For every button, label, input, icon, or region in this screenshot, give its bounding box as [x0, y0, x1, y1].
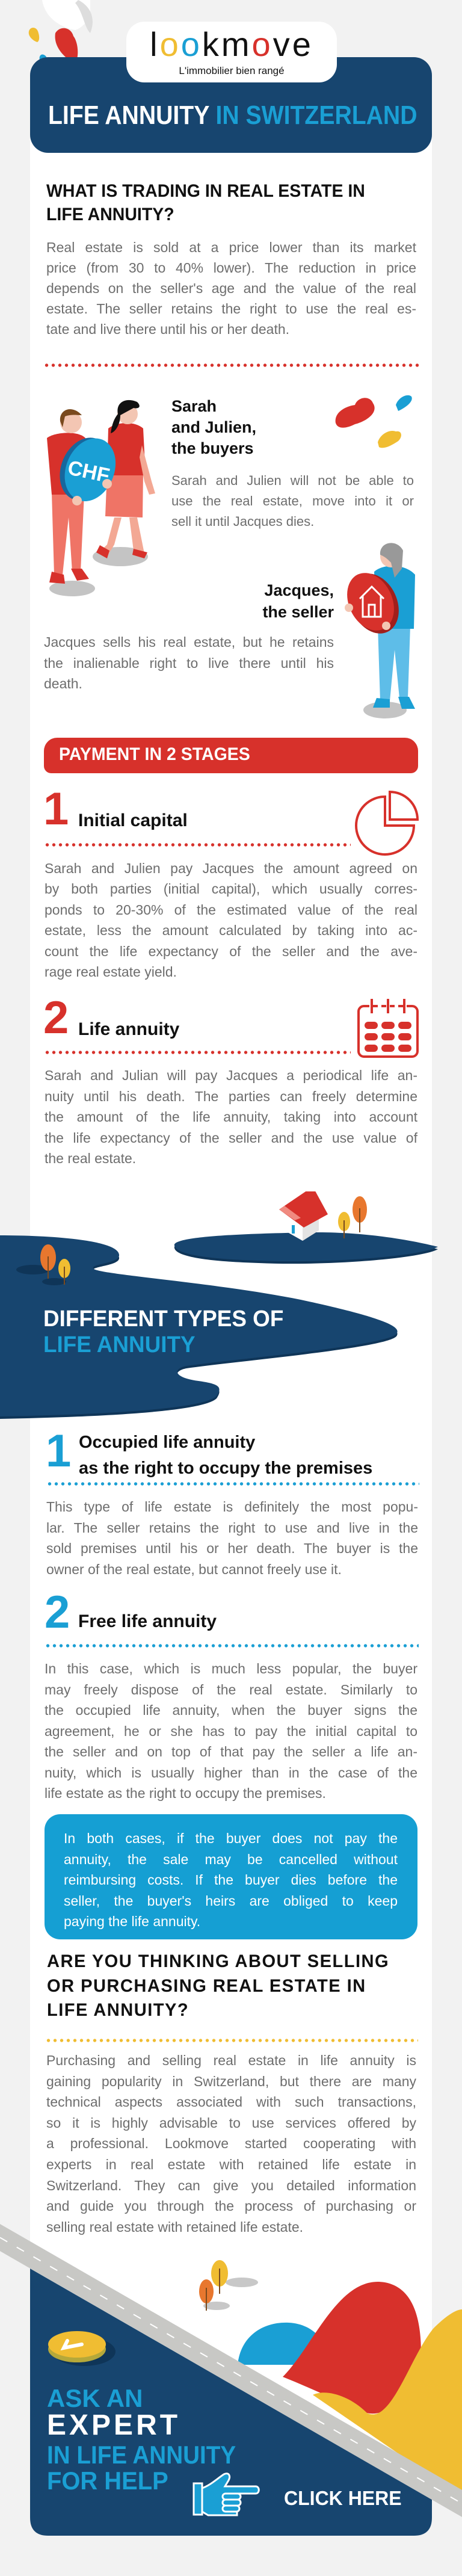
text: thinking: technical aspects associated with such transactions,: [46, 2094, 416, 2110]
callout: both cases: annuity, the sale may be cancelled without: [64, 1851, 398, 1867]
text: buyers: sell it until Jacques dies.: [171, 514, 314, 529]
text: seller: death.: [44, 676, 82, 691]
heading: different types of life annuity: [43, 1306, 283, 1357]
text: buyers: Sarah and Julien will not be able to: [171, 473, 414, 488]
callout: both cases: In both cases, if the buyer does not pay the: [64, 1830, 398, 1846]
text: stage 2: the real estate.: [45, 1151, 136, 1166]
icon: pie chart: [355, 791, 419, 856]
text: intro: depends on the seller's age and the value of the real: [46, 280, 416, 296]
heading: different types of life annuity: LIFE ANNUITY: [43, 1332, 196, 1357]
text: thinking: so it is highly advisable to use services offered by: [46, 2115, 416, 2131]
CTA text: ASK AN: [47, 2384, 143, 2412]
type 1 heading: [46, 1425, 372, 1478]
callout: both cases: [45, 1814, 417, 1939]
top decorations: [29, 0, 93, 59]
text: intro: tate and live there until his or her death.: [46, 321, 289, 337]
text: stage 2: nuity until his death. The parties can freely determine: [45, 1088, 417, 1104]
CTA text: FOR HELP: [47, 2466, 168, 2495]
heading: are you thinking: [47, 1951, 389, 2020]
text: thinking: and guide you through the process of purchasing or: [46, 2198, 416, 2214]
icon: pointing hand: [194, 2474, 259, 2515]
illustration: buyers: CHF: [66, 456, 111, 487]
heading: are you thinking: OR PURCHASING REAL ESTATE IN: [47, 1976, 366, 1995]
section bar: payment in 2 stages: PAYMENT IN 2 STAGES: [59, 744, 250, 764]
text: intro: [46, 239, 416, 337]
text: stage 2: the amount of the life annuity, taking into account: [45, 1109, 417, 1125]
text: stage 2: Sarah and Julian will pay Jacques a periodical life an-: [45, 1067, 417, 1083]
text: intro: Real estate is sold at a price lower than its market: [46, 239, 416, 255]
text: thinking: Purchasing and selling real estate in life annuity is: [46, 2052, 416, 2068]
stage 1 heading: Initial capital: [78, 811, 188, 830]
text: type 2: nuity, which is usually higher than in the case of the: [45, 1764, 417, 1780]
stage 2 heading: [43, 992, 179, 1043]
CTA text: [47, 2384, 236, 2495]
type 1 heading: as the right to occupy the premises: [79, 1459, 372, 1478]
type 1 heading: 1: [46, 1425, 71, 1477]
type 2 heading: Free life annuity: [78, 1611, 217, 1631]
text: seller: the inalienable right to live there until his: [44, 655, 334, 670]
text: thinking: a professional. Lookmove started cooperating with: [46, 2136, 416, 2151]
callout: both cases: reimbursing costs. If the buyer dies before the: [64, 1872, 398, 1888]
callout: both cases: seller, the buyer's heirs are obliged to keep: [64, 1893, 398, 1909]
CTA text: EXPERT: [47, 2409, 180, 2441]
text: thinking: selling real estate with retained life estate.: [46, 2219, 303, 2235]
text: thinking: experts in real estate with retained life estate in: [46, 2157, 416, 2172]
text: type 2: life estate as the right to occupy the premises.: [45, 1785, 326, 1801]
stage 2 heading: Life annuity: [78, 1019, 179, 1039]
bottom CTA scene: road, hills, blue panel: [0, 2224, 462, 2536]
text: stage 1: estate, less the amount calculated by taking into ac-: [45, 922, 417, 938]
logo: L'immobilier bien rangé: [179, 65, 285, 76]
text: stage 2: the life expectancy of the seller and the use value of: [45, 1130, 417, 1146]
text: stage 2: [45, 1067, 417, 1166]
stage 1 heading: [43, 783, 188, 835]
icon: calendar: [357, 999, 419, 1058]
text: type 1: sold premises until his or her death. The buyer is the: [46, 1540, 418, 1556]
text: type 2: may freely dispose of the real estate. Similarly to: [45, 1681, 417, 1697]
illustration: seller: [345, 543, 415, 718]
heading: what is trading: LIFE ANNUITY?: [46, 205, 174, 224]
icon: coin: [48, 2331, 116, 2366]
text: stage 1: rage real estate yield.: [45, 964, 177, 980]
river banner with island and house: [0, 1191, 438, 1419]
stage 1 heading: 1: [43, 783, 69, 835]
text: buyers: use the real estate, move into it or: [171, 493, 414, 508]
text: type 2: agreement, he or she has to pay the initial capital to: [45, 1723, 417, 1739]
logo: [126, 22, 337, 82]
section bar: payment in 2 stages: [44, 738, 418, 773]
text: type 1: lar. The seller retains the right to use and live in the: [46, 1520, 418, 1536]
type 1 heading: Occupied life annuity: [79, 1433, 255, 1452]
heading: are you thinking: ARE YOU THINKING ABOUT SELLING: [47, 1951, 389, 1971]
text: type 1: This type of life estate is definitely the most popu-: [46, 1499, 418, 1515]
text: intro: estate. The seller retains the right to use the real es-: [46, 301, 416, 317]
type 2 heading: [45, 1587, 217, 1638]
text: type 2: the seller and on top of that pay the seller a life an-: [45, 1744, 417, 1759]
heading: buyers: and Julien,: [171, 418, 256, 436]
text: intro: price (from 30 to 40% lower). The reduction in price: [46, 260, 416, 276]
heading: what is trading: WHAT IS TRADING IN REAL ESTATE IN: [46, 181, 365, 201]
logo: lookmove: [150, 25, 313, 63]
heading: buyers: [171, 397, 256, 457]
heading: are you thinking: LIFE ANNUITY?: [47, 2000, 189, 2020]
heading: seller: the seller: [262, 603, 334, 621]
stage 2 heading: 2: [43, 992, 69, 1043]
text: type 2: In this case, which is much less popular, the buyer: [45, 1661, 417, 1676]
text: seller: [44, 634, 334, 691]
heading: seller: [262, 581, 334, 621]
text: seller: Jacques sells his real estate, but he retains: [44, 634, 334, 650]
heading: seller: Jacques,: [264, 581, 334, 599]
text: type 1: owner of the real estate, but cannot freely use it.: [46, 1561, 342, 1577]
text: type 2: [45, 1661, 417, 1801]
text: stage 1: by both parties (initial capital), which usually corres-: [45, 881, 417, 897]
heading: what is trading: [46, 181, 365, 224]
heading: buyers: the buyers: [171, 439, 254, 457]
text: type 2: the occupied life annuity, when the buyer signs the: [45, 1702, 417, 1718]
illustration: buyers: [47, 400, 155, 596]
text: stage 1: ponds to 20-30% of the estimated value of the real: [45, 902, 417, 918]
clouds decoration: [336, 395, 412, 448]
heading: buyers: Sarah: [171, 397, 217, 415]
text: stage 1: [45, 860, 417, 980]
CTA text: IN LIFE ANNUITY: [47, 2441, 236, 2469]
title: LIFE ANNUITY IN SWITZERLAND: [48, 100, 417, 130]
text: stage 1: Sarah and Julien pay Jacques the amount agreed on: [45, 860, 417, 876]
heading: different types of life annuity: DIFFERENT TYPES OF: [43, 1306, 283, 1332]
text: buyers: [171, 473, 414, 529]
text: type 1: [46, 1499, 418, 1577]
text: stage 1: count the life expectancy of the seller and the ave-: [45, 944, 417, 959]
text: thinking: gaining popularity in Switzerland, but there are many: [46, 2074, 416, 2089]
header panel: [30, 57, 432, 153]
text: thinking: Switzerland. They can give you detailed information: [46, 2178, 416, 2193]
callout: both cases: paying the life annuity.: [64, 1913, 200, 1929]
type 2 heading: 2: [45, 1587, 70, 1638]
button: click here: CLICK HERE: [284, 2487, 402, 2509]
text: thinking: [46, 2052, 416, 2235]
